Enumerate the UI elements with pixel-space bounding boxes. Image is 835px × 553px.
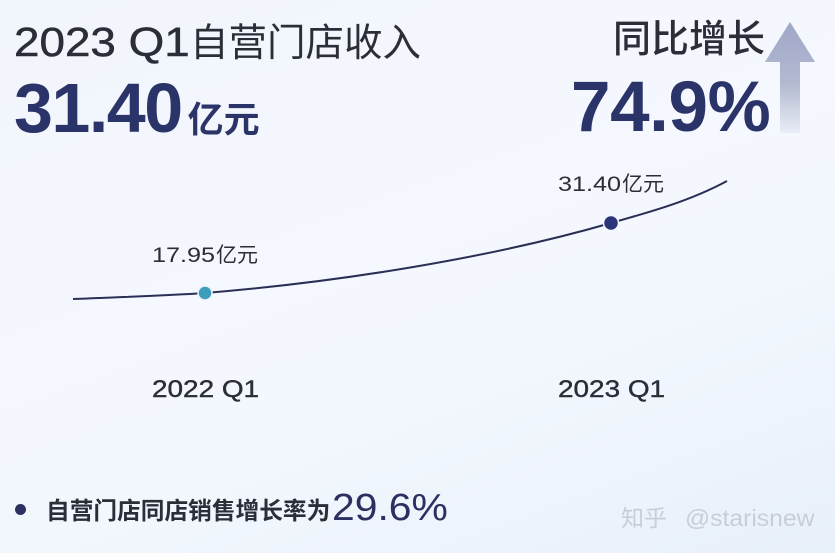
data label: 17.95亿元 <box>152 244 258 267</box>
title: 2023 Q1 revenue: 2023 Q1 <box>14 19 190 65</box>
title: 2023 Q1 revenue: 自营门店收入 <box>190 22 421 65</box>
data point: 2023 Q1 <box>604 216 618 230</box>
footnote: same-store sales growth: 29.6% <box>332 487 448 529</box>
data label: 17.95亿元: 17.95 <box>152 244 215 267</box>
headline value: 31.40亿元: 31.40亿元 <box>14 69 260 147</box>
footnote: same-store sales growth: 自营门店同店销售增长率为 <box>46 499 330 525</box>
axis label: 2022 Q1: 2022 Q1 <box>152 376 259 403</box>
data label: 17.95亿元: 亿元 <box>216 244 258 267</box>
data label: 31.40亿元 <box>558 173 664 196</box>
bullet <box>15 504 26 515</box>
data point: 2022 Q1 <box>198 286 212 300</box>
data label: 31.40亿元: 31.40 <box>558 173 621 196</box>
watermark: 知乎 <box>621 505 667 531</box>
footnote: same-store sales growth <box>46 487 448 529</box>
headline value: 74.9%: 74.9% <box>571 68 770 147</box>
axis label: 2023 Q1: 2023 Q1 <box>558 376 665 403</box>
watermark <box>621 505 815 531</box>
trend line <box>73 181 727 299</box>
data label: 31.40亿元: 亿元 <box>622 173 664 196</box>
watermark: @starisnew <box>685 505 815 531</box>
icon: growth arrow <box>765 22 815 133</box>
heading: year on year growth: 同比增长 <box>613 19 765 61</box>
title: 2023 Q1 revenue <box>14 19 421 65</box>
